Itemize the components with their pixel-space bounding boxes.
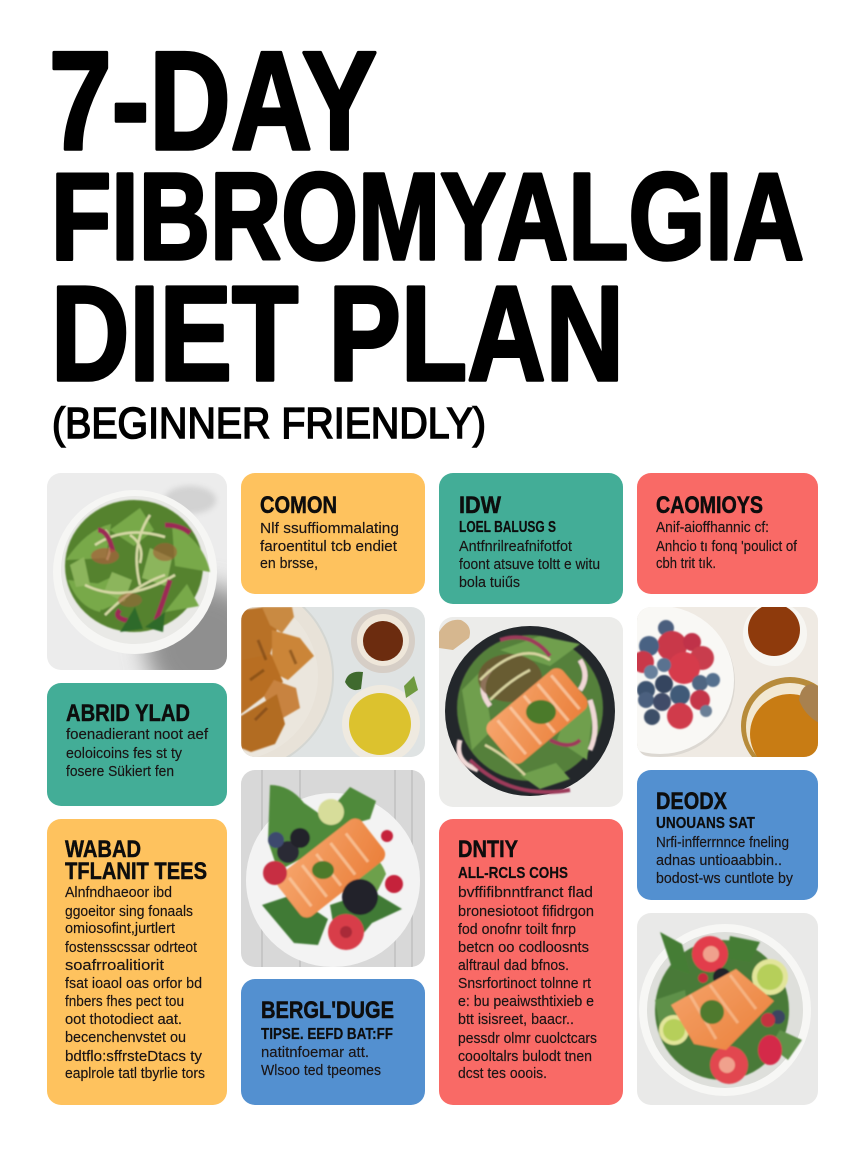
card: yellow Wabad: WABAD xyxy=(65,836,141,863)
card: blue Bergl'duge: TIPSE. EEFD BAT:FF xyxy=(261,1026,393,1043)
card: red Dntiy: pessdr olmr cuolctcars xyxy=(458,1031,597,1047)
title xyxy=(49,22,804,409)
card: blue Bergl'duge: BERGL'DUGE xyxy=(261,997,394,1024)
photo: salmon in dark bowl xyxy=(439,617,623,807)
photo: mixed berries with tea and honey xyxy=(637,607,818,757)
card: blue Bergl'duge: natitnfoemar att. xyxy=(261,1045,369,1061)
card: yellow Wabad xyxy=(47,819,227,1105)
card: blue Deodx: DEODX xyxy=(656,788,727,815)
card: blue Deodx: adnas untioaabbin.. xyxy=(656,853,782,869)
photo: green salad bowl xyxy=(47,473,227,670)
card: red Dntiy xyxy=(439,819,623,1105)
card: red Dntiy: bvffifibnntfranct flad xyxy=(458,885,593,901)
card: red Dntiy: DNTIY xyxy=(458,836,518,863)
title: 7-DAY xyxy=(49,22,377,179)
photo: salmon on berry plate xyxy=(241,770,425,967)
card: yellow Comon xyxy=(241,473,425,594)
card: red Dntiy: fod onofnr toilt fnrp xyxy=(458,922,576,938)
card: yellow Wabad: fnbers fhes pect tou xyxy=(65,994,184,1010)
card: yellow Wabad: eaplrole tatl tbyrlie tors xyxy=(65,1066,205,1082)
sauce cup: yellow xyxy=(342,685,420,763)
card: teal Abrid Ylad xyxy=(47,683,227,806)
card: blue Deodx xyxy=(637,770,818,900)
card: teal Abrid Ylad: ABRID YLAD xyxy=(66,700,190,727)
card: red Dntiy: Snsrfortinoct tolnne rt xyxy=(458,976,591,992)
card: red Caomioys: Anhcio tı fonq 'poulict of xyxy=(656,539,798,555)
photo: crispy fried pieces with sauces xyxy=(241,607,425,757)
card: yellow Wabad: bdtflo:sffrsteDtacs ty xyxy=(65,1049,203,1065)
card: yellow Comon: faroentitul tcb endiet xyxy=(260,539,397,555)
card: teal Idw xyxy=(439,473,623,604)
card: teal Abrid Ylad: fosere Sükiert fen xyxy=(66,764,174,780)
card: yellow Wabad: fsat ioaol oas orfor bd xyxy=(65,976,202,992)
card: yellow Comon: Nlf ssuffiommalating xyxy=(260,521,399,537)
card: teal Idw: Antfnrilreafnifotfot xyxy=(459,539,572,555)
sauce cup: dark xyxy=(351,609,415,673)
card: red Dntiy: e: bu peaiwsthtixieb e xyxy=(458,994,594,1010)
card: red Dntiy: bronesiotoot fifidrgon xyxy=(458,904,594,920)
card: teal Abrid Ylad: eoloicoins fes st ty xyxy=(66,746,183,762)
card: yellow Wabad: Alnfndhaeoor ibd xyxy=(65,885,172,901)
card: yellow Comon: en brsse, xyxy=(260,556,318,572)
card: yellow Wabad: TFLANIT TEES xyxy=(65,858,207,885)
card: blue Deodx: UNOUANS SAT xyxy=(656,815,755,832)
card: blue Bergl'duge: Wlsoo ted tpeomes xyxy=(261,1063,381,1079)
card: blue Deodx: Nrfi-infferrnnce fneling xyxy=(656,835,789,851)
card: teal Idw: foont atsuve toltt e witu xyxy=(459,557,600,573)
salmon fillet xyxy=(483,665,591,767)
card: blue Deodx: bodost-ws cuntlote by xyxy=(656,871,794,887)
card: teal Idw: bola tuiűs xyxy=(459,575,520,591)
card: yellow Wabad: omiosofint,jurtlert xyxy=(65,921,175,937)
subtitle: (BEGINNER FRIENDLY) xyxy=(52,399,486,448)
card: red Dntiy: coooltalrs bulodt tnen xyxy=(458,1049,592,1065)
card: yellow Wabad: ggoeitor sing fonaals xyxy=(65,904,193,920)
card: yellow Wabad: becenchenvstet ou xyxy=(65,1030,186,1046)
card: red Caomioys: cbh trit tık. xyxy=(656,556,716,572)
card: blue Bergl'duge xyxy=(241,979,425,1105)
card: red Caomioys: CAOMIOYS xyxy=(656,492,763,519)
tea cup xyxy=(743,602,807,666)
card: yellow Wabad: fostensscssar odrteot xyxy=(65,940,197,956)
card: teal Idw: IDW xyxy=(459,492,501,519)
photo: salmon bowl with strawberries and lime xyxy=(637,913,818,1105)
card: yellow Comon: COMON xyxy=(260,492,337,519)
salmon fillet xyxy=(671,969,774,1050)
salmon fillet xyxy=(273,815,389,921)
card: red Dntiy: btt isisreet, baacr.. xyxy=(458,1012,574,1028)
card: teal Idw: LOEL BALUSG S xyxy=(459,519,556,536)
honey cup xyxy=(741,677,818,757)
card: red Dntiy: ALL-RCLS COHS xyxy=(458,865,568,882)
card: red Caomioys xyxy=(637,473,818,594)
card: red Dntiy: alftraul dad bfnos. xyxy=(458,958,569,974)
card: red Dntiy: dcst tes ooois. xyxy=(458,1066,547,1082)
card: yellow Wabad: oot thotodiect aat. xyxy=(65,1012,182,1028)
card: yellow Wabad: soafrroalitiorit xyxy=(65,958,164,974)
title: DIET PLAN xyxy=(51,258,624,409)
card: teal Abrid Ylad: foenadierant noot aef xyxy=(66,727,209,743)
card: red Dntiy: betcn oo codloosnts xyxy=(458,940,589,956)
card: red Caomioys: Anif-aioffhannic cf: xyxy=(656,520,769,536)
